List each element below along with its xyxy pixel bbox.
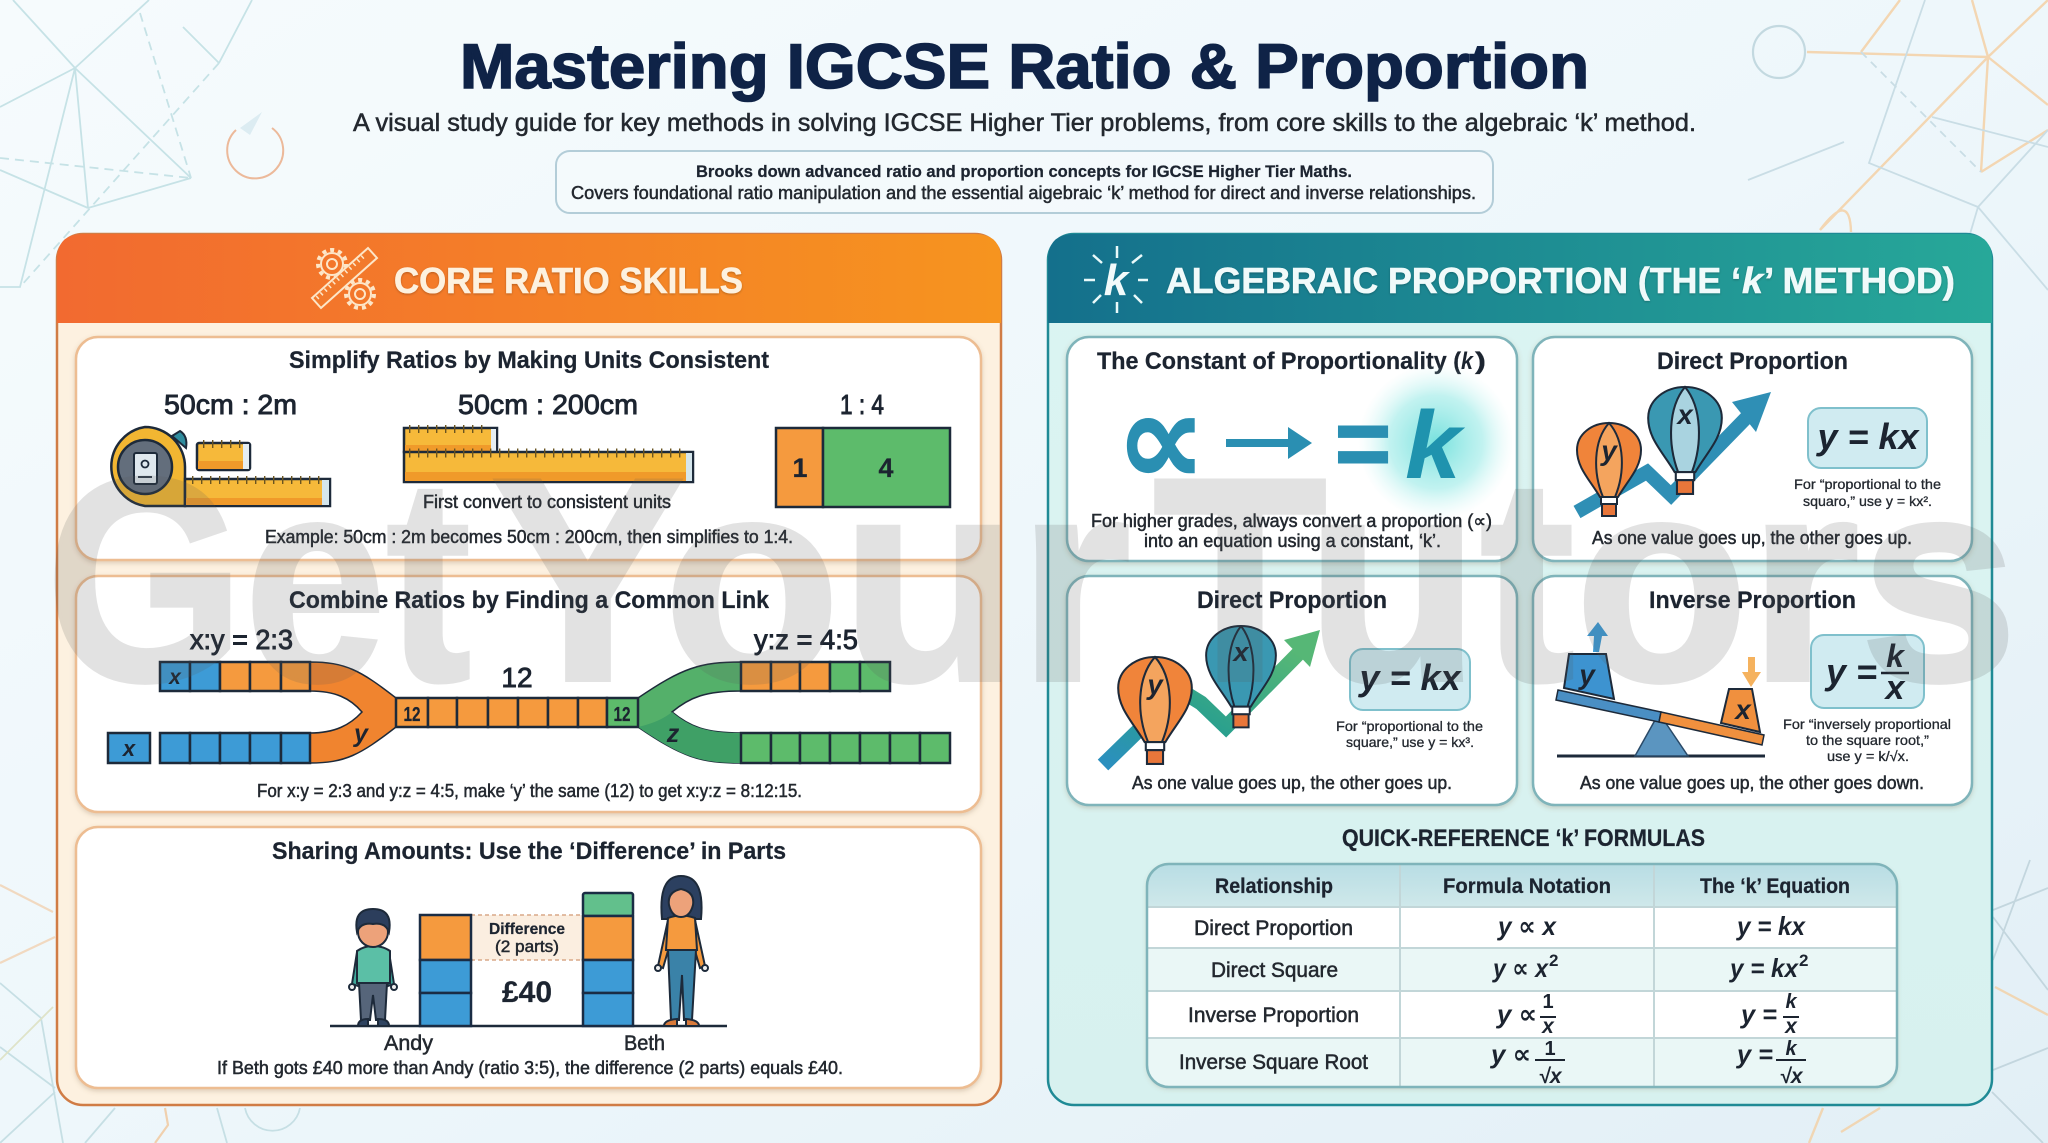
card heading: k	[1461, 348, 1474, 375]
panel header	[1048, 234, 1992, 323]
merging bar diagram: x	[168, 666, 182, 689]
row: inverse square root: √x	[1779, 1065, 1804, 1088]
note: For “proportional to the	[1794, 476, 1941, 492]
icon: orange balloon y	[1577, 423, 1641, 516]
k glow	[1358, 364, 1514, 520]
icon: orange balloon y	[1118, 657, 1192, 764]
row: inverse proportion: k	[1785, 991, 1797, 1013]
explanation text: If Beth gots £40 more than Andy (ratio 3:5), the difference (2 parts) equals £40.	[217, 1058, 843, 1078]
explanation text: For higher grades, always convert a proportion (∝)	[1091, 511, 1492, 531]
bar: Andy	[420, 915, 471, 1026]
subtitle: A visual study guide for key methods in solving IGCSE Higher Tier problems, from core skills to the algebraic ‘k’ method.	[353, 109, 1696, 137]
heading: ALGEBRAIC PROPORTION (THE ‘	[1166, 260, 1741, 301]
label: Andy: Andy	[384, 1032, 434, 1055]
table header row: Formula Notation	[1443, 875, 1611, 898]
note: For “proportional to the	[1336, 718, 1483, 734]
bar: Beth	[583, 893, 633, 1026]
note	[1783, 716, 1951, 764]
caption: As one value goes up, the other goes up.	[1592, 528, 1912, 548]
panel body	[57, 234, 1001, 1105]
caption: first convert: First convert to consistent units	[423, 492, 671, 512]
heading: ’ METHOD)	[1764, 260, 1955, 301]
arrow	[1226, 439, 1296, 447]
merging bar diagram: 12	[404, 704, 420, 726]
formula box	[1808, 408, 1927, 468]
row: inverse square root: 1	[1544, 1038, 1556, 1060]
row: direct square: y = kx	[1728, 953, 1799, 983]
label: Beth: Beth	[624, 1032, 665, 1055]
table header row	[1215, 875, 1850, 898]
watermark: Get	[46, 418, 471, 742]
table header row: The ‘k’ Equation	[1700, 875, 1850, 898]
watermark: Tutors	[1153, 418, 2018, 742]
row: inverse proportion	[1188, 991, 1799, 1038]
explanation text	[1091, 511, 1492, 551]
icon: blue balloon x: x	[1231, 636, 1250, 667]
card heading: Direct Proportion	[1197, 587, 1387, 614]
table: quick-reference formulas	[1147, 864, 1897, 1088]
row: inverse proportion: Inverse Proportion	[1188, 1004, 1359, 1027]
row: direct square	[1211, 951, 1808, 983]
note: For “inversely proportional	[1783, 716, 1951, 732]
explanation text: into an equation using a constant, ‘k’.	[1144, 531, 1441, 551]
amount label: £40	[502, 976, 552, 1009]
icon: tape measure	[111, 427, 330, 506]
row: inverse square root: √x	[1538, 1065, 1563, 1088]
heading: CORE RATIO SKILLS	[394, 260, 743, 301]
merging bar diagram: z	[666, 720, 680, 748]
summary box: Covers foundational ratio manipulation and the essential aigebraic ‘k’ method for direct and inverse relationships.	[571, 183, 1476, 203]
card: direct proportion (green arrow)	[1067, 576, 1517, 805]
panel: algebraic proportion	[1048, 234, 1992, 1105]
upper right bar	[741, 662, 890, 691]
summary box: Brooks down advanced ratio and proportion concepts for IGCSE Higher Tier Maths.	[696, 162, 1352, 181]
note: to the square root,”	[1806, 732, 1929, 748]
example text: Example: 50cm : 2m becomes 50cm : 200cm, then simplifies to 1:4.	[265, 527, 793, 547]
icon: blue balloon x	[1206, 626, 1276, 727]
formula box	[1811, 635, 1924, 708]
row: direct proportion: y = kx	[1735, 911, 1806, 941]
icon: seesaw	[1556, 622, 1765, 756]
merging bar diagram: y	[352, 720, 369, 748]
upper left bar	[160, 662, 310, 691]
row: inverse square root: y ∝	[1489, 1039, 1531, 1069]
icon: two rulers	[404, 428, 693, 482]
card heading: Simplify Ratios by Making Units Consistent	[289, 347, 769, 374]
icon: rising arrow	[1103, 630, 1320, 765]
card: direct proportion (blue arrow)	[1533, 337, 1972, 561]
row: direct square: Direct Square	[1211, 959, 1338, 982]
formula box: y = kx	[1357, 657, 1463, 698]
note	[1794, 476, 1941, 509]
card heading: Inverse Proportion	[1649, 587, 1856, 614]
icon: blue balloon x	[1648, 387, 1722, 494]
merging bar diagram: 12	[614, 704, 630, 726]
symbol: proportional to: ∝	[1116, 365, 1206, 515]
summary box	[556, 151, 1493, 213]
label: 1 : 4: 1 : 4	[840, 389, 884, 420]
label: 50cm : 200cm: 50cm : 200cm	[458, 389, 638, 420]
left merge: orange y	[310, 662, 396, 763]
row: inverse proportion: 1	[1542, 991, 1554, 1013]
row: direct square: 2	[1799, 951, 1808, 970]
icon: seesaw: x	[1733, 694, 1752, 725]
bar: ratio 1 to 4: 4	[878, 453, 894, 483]
merging bar diagram: x	[122, 736, 136, 761]
row: inverse square root: y =	[1735, 1039, 1773, 1069]
card heading: Sharing Amounts: Use the ‘Difference’ in Parts	[272, 838, 786, 865]
card heading: Direct Proportion	[1657, 348, 1848, 375]
difference band: (2 parts)	[495, 937, 559, 956]
icon: rising arrow	[1577, 392, 1771, 512]
difference band: Difference	[489, 921, 565, 938]
icon: ruler, percent and gears	[312, 248, 377, 308]
icon: girl Beth	[655, 876, 708, 1026]
formula box: y =	[1824, 651, 1877, 692]
note	[1336, 718, 1483, 750]
row: inverse proportion: y ∝	[1495, 999, 1537, 1029]
row: inverse square root: Inverse Square Root	[1179, 1051, 1368, 1074]
row: inverse proportion: x	[1784, 1015, 1798, 1038]
card: sharing amounts	[76, 827, 981, 1088]
watermark: Your	[491, 418, 1131, 742]
formula box: x	[1884, 669, 1907, 707]
row: direct proportion: y ∝ x	[1496, 911, 1557, 941]
note: squaro,” use y = kx².	[1803, 493, 1932, 509]
note: square,” use y = kx³.	[1346, 734, 1474, 750]
icon: k with rays	[1084, 246, 1148, 313]
row: direct proportion: Direct Proportion	[1194, 917, 1353, 940]
table header row: Relationship	[1215, 875, 1333, 898]
row: direct square: 2	[1549, 951, 1558, 970]
row: direct square: y ∝ x	[1491, 953, 1549, 983]
formula box: k	[1886, 638, 1906, 674]
panel body	[1048, 234, 1992, 1105]
merging bar diagram	[108, 662, 950, 763]
ground line	[330, 1025, 727, 1027]
heading: k	[1742, 260, 1765, 301]
symbol: k: k	[1405, 392, 1466, 499]
icon: seesaw: y	[1577, 659, 1596, 690]
card: simplify ratios	[76, 337, 981, 560]
icon: blue balloon x: x	[1675, 399, 1694, 430]
label: y:z: y:z = 4:5	[754, 624, 858, 655]
card heading: Combine Ratios by Finding a Common Link	[289, 587, 770, 614]
card heading: )	[1475, 348, 1486, 375]
panel: core ratio skills	[57, 234, 1001, 1105]
label: 12: 12	[501, 662, 533, 693]
formula box	[1350, 649, 1470, 710]
symbol: equals: =	[1335, 390, 1391, 497]
card: inverse proportion	[1533, 576, 1972, 805]
watermark	[46, 418, 2018, 742]
icon: orange balloon y: y	[1599, 435, 1618, 466]
card heading: The Constant of Proportionality (	[1097, 348, 1461, 375]
label: x:y: x:y = 2:3	[190, 624, 293, 655]
row: direct proportion	[1194, 911, 1806, 941]
right merge: green z	[638, 662, 741, 763]
panel header	[57, 234, 1001, 323]
row: inverse proportion: x	[1541, 1015, 1555, 1038]
row: inverse square root	[1179, 1038, 1806, 1088]
row: inverse proportion: y =	[1739, 999, 1777, 1029]
caption: As one value goes up, the other goes up.	[1132, 773, 1452, 793]
label: 50cm : 2m: 50cm : 2m	[164, 389, 297, 420]
difference band	[471, 915, 583, 960]
card: constant of proportionality	[1067, 337, 1517, 561]
lower right bar	[741, 733, 950, 763]
lower left bar	[108, 733, 310, 763]
title: Mastering IGCSE Ratio & Proportion	[460, 32, 1589, 102]
bar: ratio 1 to 4	[776, 428, 950, 507]
icon: orange balloon y: y	[1145, 669, 1164, 700]
icon: boy Andy	[349, 909, 397, 1026]
icon: k with rays: k	[1104, 256, 1131, 305]
heading: quick-reference formulas: QUICK-REFERENCE ‘k’ FORMULAS	[1342, 825, 1705, 852]
explanation text: For x:y = 2:3 and y:z = 4:5, make ‘y’ the same (12) to get x:y:z = 8:12:15.	[257, 781, 802, 801]
note: use y = k/√x.	[1827, 748, 1909, 764]
caption: As one value goes up, the other goes down.	[1580, 773, 1924, 793]
centre bar	[396, 698, 638, 727]
formula box: y = kx	[1815, 416, 1921, 457]
row: inverse square root: k	[1785, 1038, 1797, 1060]
card: combine ratios	[76, 576, 981, 812]
bar: ratio 1 to 4: 1	[792, 453, 808, 483]
